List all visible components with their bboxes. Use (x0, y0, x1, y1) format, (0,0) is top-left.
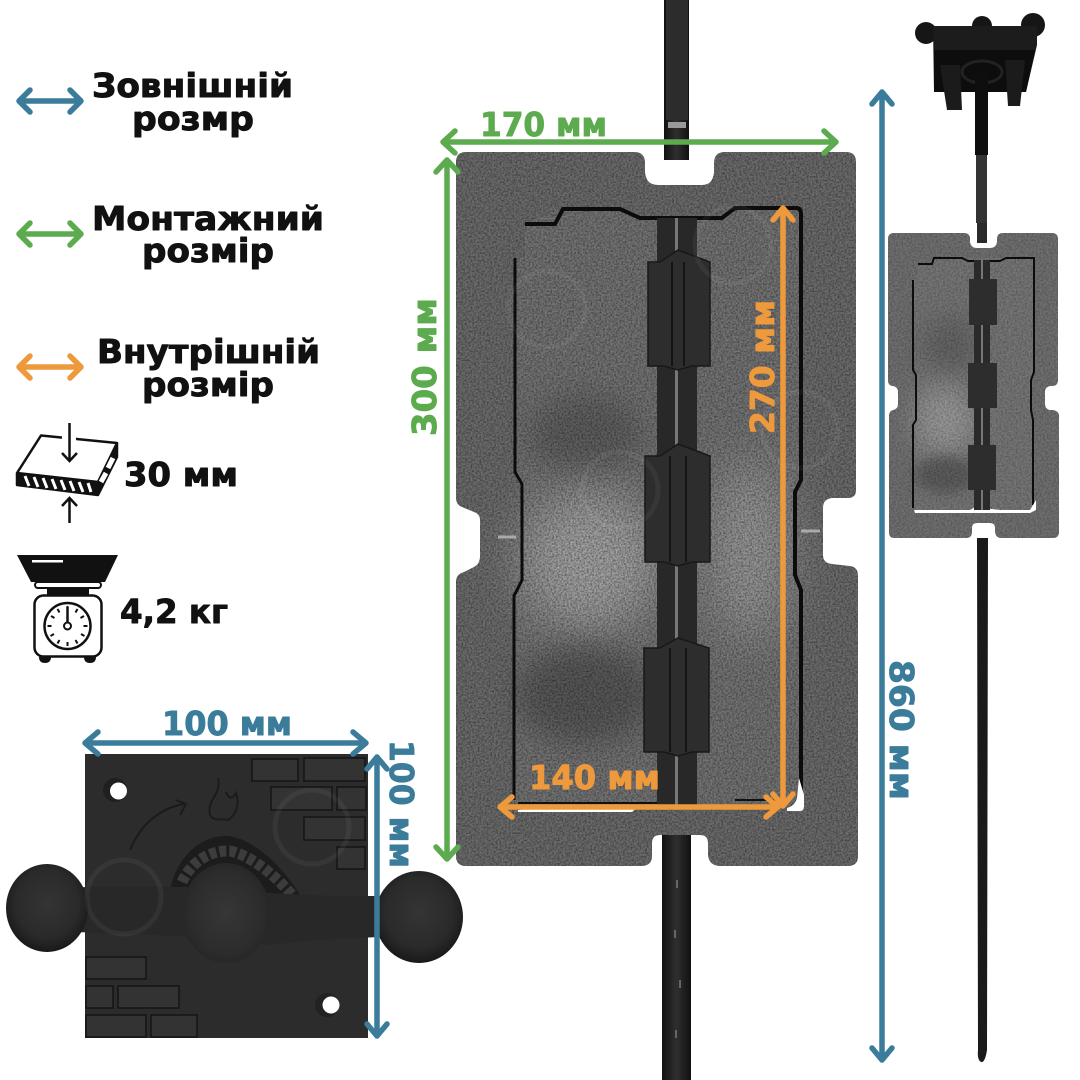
product: cast iron door detail with handle (6, 754, 463, 1038)
top handle bracket (915, 13, 1045, 110)
icon: green double arrow (19, 223, 81, 245)
inner panel gap lines (514, 208, 801, 808)
product: main damper plate (440, 140, 870, 880)
arrow: 270 mm internal height (773, 208, 793, 806)
label: mounting size (92, 199, 324, 270)
side arrow marks (498, 531, 820, 537)
small plate inner panel (913, 258, 1033, 510)
watermark marks (509, 207, 838, 528)
product: central rod (662, 0, 691, 1080)
small plate (888, 233, 1059, 538)
arrow: 140 mm internal width (500, 797, 778, 817)
label: 860 mm: 860 мм (882, 660, 921, 800)
door arch with bricks (170, 836, 300, 900)
small plate brackets (968, 279, 997, 490)
small plate gap lines (913, 258, 1034, 508)
label: 300 mm: 300 мм (405, 298, 444, 436)
label: internal size (97, 332, 320, 404)
watermark marks (87, 790, 349, 934)
white gap at bottom of panel (518, 778, 804, 812)
icon: thickness block (17, 423, 117, 523)
label: external size (92, 66, 293, 138)
icon: kitchen scale (17, 555, 118, 663)
label: external size: розмр (132, 99, 254, 138)
legend: mounting size (19, 199, 324, 270)
arrow: 300 mm mounting height (436, 160, 458, 859)
text: weight: 4,2 кг (120, 592, 228, 631)
label: mounting size: Монтажний (92, 199, 324, 238)
label: external size: Зовнішній (92, 66, 293, 105)
label: internal size: розмір (142, 365, 274, 404)
handle centre ball (182, 863, 270, 963)
arrow: 170 mm mounting width (443, 131, 836, 153)
legend: internal size (19, 332, 320, 404)
label: 270 mm: 270 мм (743, 300, 782, 434)
label: 100 mm vertical: 100 мм (382, 740, 421, 868)
product: full damper side assembly (880, 13, 1065, 1062)
arrow: 100 mm horizontal (85, 732, 366, 754)
handle left ball (6, 864, 88, 952)
rod upper and lower (975, 72, 988, 1062)
label: 100 mm horizontal: 100 мм (162, 704, 292, 743)
door mounting holes (103, 778, 340, 1017)
label: internal size: Внутрішній (97, 332, 320, 371)
handle right ball (375, 871, 463, 963)
icon: orange double arrow (19, 356, 81, 378)
arrow: 860 mm total height (872, 92, 892, 1060)
central rail (657, 218, 697, 808)
inner sliding panel (515, 208, 802, 812)
label: mounting size: розмір (142, 231, 274, 270)
label: 170 mm: 170 мм (480, 105, 607, 144)
text: thickness: 30 мм (124, 455, 238, 494)
rail brackets (644, 250, 710, 756)
door bricks (86, 758, 366, 1037)
label: 140 mm: 140 мм (529, 758, 660, 797)
handle bar (40, 887, 420, 945)
icon: blue double arrow (19, 90, 81, 112)
door plate (85, 754, 368, 1038)
arrow: 100 mm vertical (367, 757, 387, 1036)
door embossed flame and arrow (130, 778, 238, 850)
legend: external size (19, 66, 293, 138)
